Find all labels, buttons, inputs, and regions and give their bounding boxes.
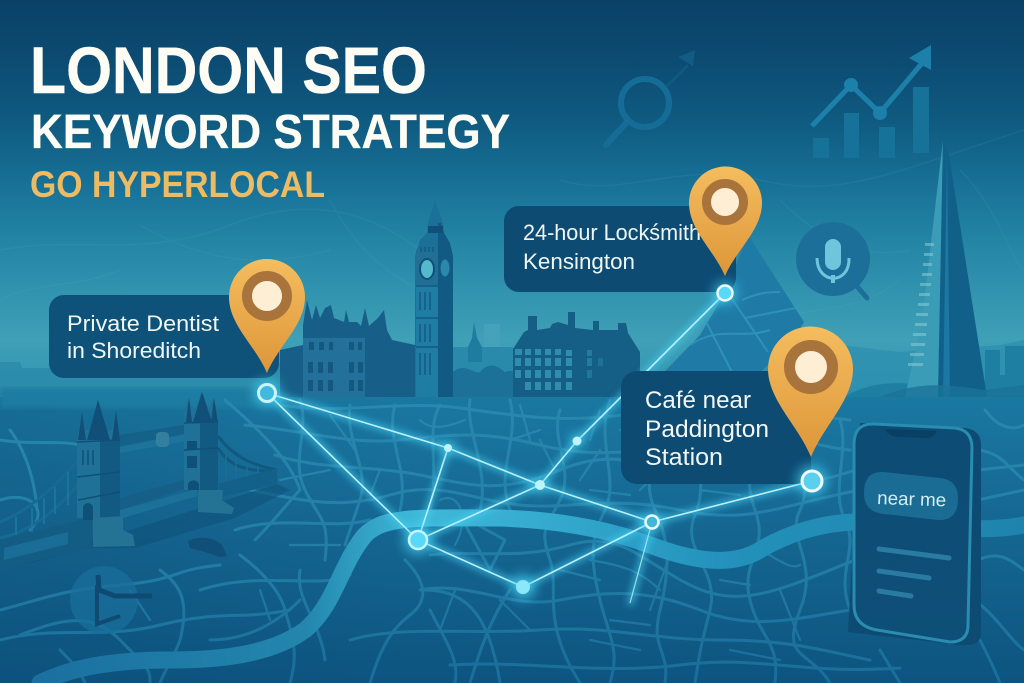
- small island shadow: [188, 538, 227, 557]
- right chains: [218, 436, 277, 472]
- callout: 24-hour Locksmith: [504, 206, 736, 292]
- callout: Café near Paddington Station: [621, 371, 811, 484]
- title: [30, 33, 510, 205]
- Tower Bridge: [0, 392, 290, 572]
- subtitle: Go Hyperlocal: GO HYPERLOCAL: [30, 164, 325, 205]
- callout: Private Dentist: in Shoreditch: [67, 338, 201, 363]
- faint sky street lines: [0, 130, 1024, 330]
- faint arrowhead: [678, 50, 695, 66]
- road span: [120, 480, 184, 510]
- pin: Paddington: [768, 326, 853, 457]
- Houses of Parliament: [280, 300, 415, 397]
- far hazy skyline left: [0, 360, 300, 400]
- right tower: [184, 392, 218, 490]
- callout: Private Dentist: Private Dentist: [67, 311, 220, 336]
- near me label: near me: [877, 487, 947, 510]
- trees: [453, 366, 525, 397]
- magnifier icon: [606, 66, 687, 145]
- route nodes: [254, 282, 827, 599]
- side clock face: [440, 260, 450, 276]
- route lines: [267, 293, 812, 605]
- microphone search icon: [796, 222, 870, 298]
- road network: [0, 400, 1024, 683]
- result lines: [879, 549, 949, 596]
- faint arrow: [667, 66, 687, 86]
- river Thames: [40, 518, 1024, 683]
- left tower: [77, 400, 120, 518]
- clock face: [420, 259, 434, 279]
- phone: [848, 423, 981, 645]
- title line: London SEO: LONDON SEO: [30, 33, 427, 107]
- left pier: [93, 516, 135, 547]
- left chains: [0, 460, 97, 538]
- callout: Private Dentist: [49, 295, 279, 378]
- bridge shadow: [0, 484, 290, 570]
- compass-like circle icon: [70, 566, 152, 634]
- right pier: [198, 490, 234, 514]
- right foreground hills: [880, 385, 1024, 397]
- pin: Kensington: [689, 166, 762, 276]
- The Shard: [905, 140, 987, 397]
- background sky: [0, 0, 1024, 400]
- callout: 24-hour Locksmith: 24-hour Lockśmith: [523, 220, 701, 245]
- walkway joint: [156, 432, 169, 447]
- left deck: [0, 517, 92, 572]
- callout: Café near Paddington Station: Paddington: [645, 416, 769, 443]
- callout: Café near Paddington Station: Café near: [645, 387, 751, 414]
- distant block: [484, 324, 500, 348]
- map ground: [0, 397, 1024, 683]
- distant low buildings: [453, 347, 513, 397]
- phone notch: [885, 429, 937, 438]
- callout: Café near Paddington Station: Station: [645, 444, 723, 471]
- chart icon: [812, 45, 931, 158]
- right deck: [218, 468, 277, 497]
- high walkways: [120, 425, 184, 446]
- brick block building: [513, 312, 640, 397]
- distant spire: [468, 322, 482, 362]
- Big Ben: [415, 200, 453, 397]
- far buildings right: [840, 346, 1024, 400]
- title line: Keyword Strategy: KEYWORD STRATEGY: [31, 106, 510, 159]
- search pill: [864, 472, 958, 520]
- dark triangle map shape behind Kensington pin: [640, 235, 804, 397]
- callout: 24-hour Locksmith: Kensington: [523, 249, 635, 274]
- far hazy skyline right: [690, 335, 1024, 400]
- pin: Shoreditch: [229, 259, 305, 373]
- triangle streets: [690, 292, 796, 378]
